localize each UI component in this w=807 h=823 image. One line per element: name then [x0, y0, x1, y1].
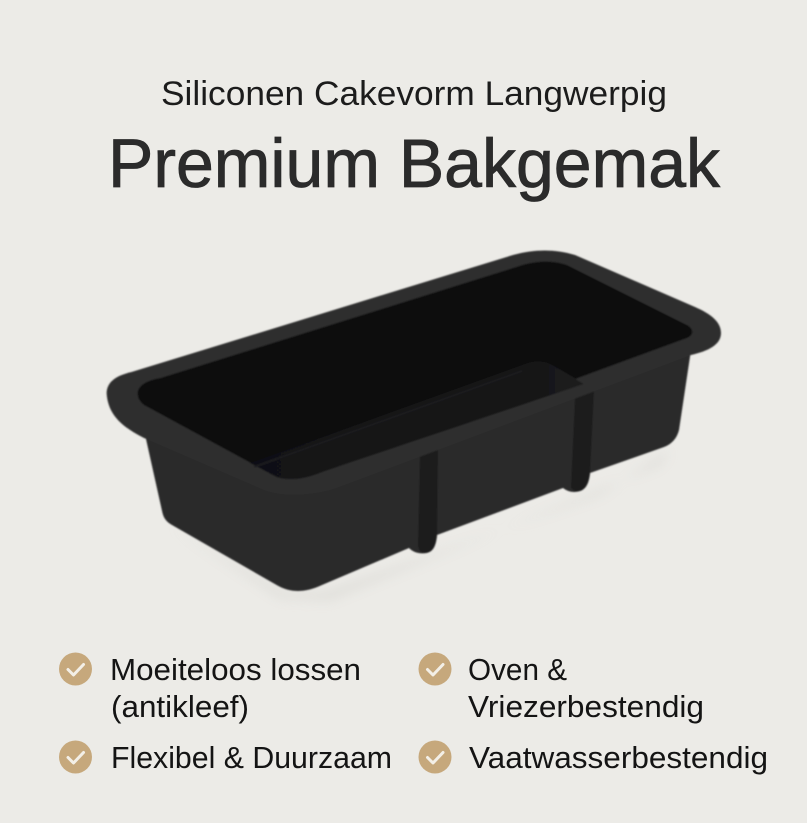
feature text: Oven &	[468, 652, 567, 687]
feature: Moeiteloos lossen (antikleef)	[59, 652, 361, 724]
subtitle: Siliconen Cakevorm Langwerpig	[161, 75, 667, 113]
pan rib left	[418, 448, 438, 553]
feature text: Vriezerbestendig	[468, 689, 704, 724]
product image: silicone loaf pan	[107, 250, 721, 600]
icon: check badge	[59, 740, 92, 774]
pan floor ridge	[254, 371, 522, 467]
pan interior	[138, 261, 692, 479]
title: Premium Bakgemak	[108, 125, 720, 202]
feature: Oven & Vriezerbestendig	[418, 652, 704, 724]
feature text: (antikleef)	[111, 689, 249, 724]
pan rim	[107, 250, 721, 495]
feature text: Flexibel & Duurzaam	[111, 740, 392, 775]
feature text: Vaatwasserbestendig	[469, 740, 768, 775]
feature: Vaatwasserbestendig	[418, 740, 768, 775]
icon: check badge	[59, 652, 92, 686]
pan floor	[250, 361, 584, 479]
icon: check badge	[418, 740, 452, 774]
icon: check badge	[418, 652, 452, 686]
feature: Flexibel & Duurzaam	[59, 740, 392, 775]
pan rib right	[571, 390, 594, 491]
pan shadow	[170, 450, 670, 600]
feature text: Moeiteloos lossen	[110, 652, 361, 687]
pan body	[144, 350, 691, 591]
